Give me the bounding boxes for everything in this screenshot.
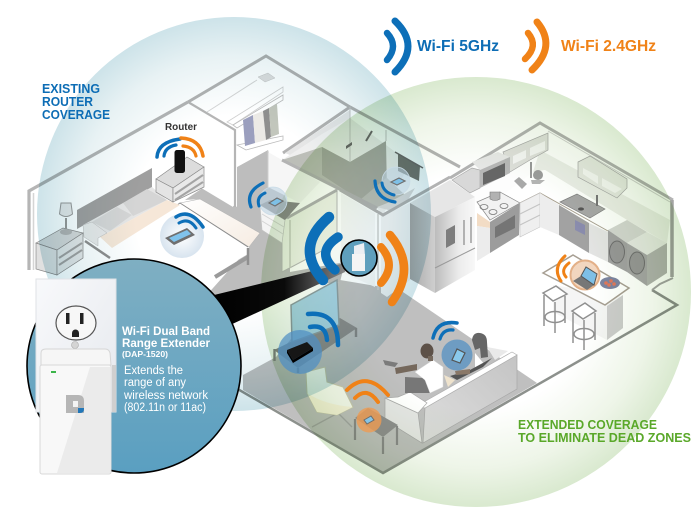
callout text: Wi-Fi Dual Band bbox=[122, 326, 210, 338]
washer and dryer bbox=[608, 220, 647, 243]
callout text: (802.11n or 11ac) bbox=[124, 402, 206, 414]
central walls bbox=[282, 177, 450, 297]
green coverage circle bbox=[261, 77, 691, 507]
counter top bbox=[503, 170, 627, 230]
night table bbox=[36, 228, 83, 250]
callout text: (DAP-1520) bbox=[122, 350, 168, 359]
sofa bbox=[385, 347, 517, 443]
grey living room floor bbox=[243, 280, 537, 472]
device bubble: laptop on sofa bbox=[433, 323, 472, 370]
callout text bbox=[122, 326, 211, 414]
kitchen bbox=[410, 123, 673, 293]
router with wifi arcs bbox=[157, 138, 203, 173]
label: existing router coverage: ROUTER bbox=[42, 94, 94, 109]
device bubble: bathroom phone bbox=[375, 167, 410, 202]
kitchen and bedroom white floor bbox=[28, 150, 677, 473]
bathroom bbox=[282, 107, 460, 215]
closet bbox=[188, 56, 350, 207]
lamp bbox=[60, 203, 72, 216]
legend: wifi 2.4GHz: Wi-Fi 2.4GHz bbox=[561, 38, 656, 55]
device bubble: set-top box bbox=[278, 314, 338, 374]
label: existing router coverage: EXISTING bbox=[42, 81, 100, 96]
callout beam bbox=[210, 263, 345, 332]
label: extended coverage: EXTENDED COVERAGE bbox=[518, 417, 657, 432]
TV bbox=[274, 280, 357, 373]
large callout circle bbox=[27, 259, 241, 474]
headboard bbox=[77, 168, 152, 229]
callout text: wireless network bbox=[123, 390, 208, 402]
fridge bbox=[410, 180, 475, 217]
callout text: range of any bbox=[124, 377, 186, 389]
legend: wifi 2.4GHz bbox=[525, 22, 656, 70]
sofa inner arm bbox=[487, 347, 508, 360]
device bubble: hallway phone bbox=[250, 183, 287, 215]
lower cabinets bbox=[477, 213, 490, 228]
device bubble: island laptop bbox=[557, 256, 600, 290]
legend: wifi 5GHz bbox=[387, 21, 499, 72]
hallway wall bbox=[268, 152, 320, 203]
large wifi arcs: 2.4GHz bbox=[381, 235, 404, 302]
toaster and mixer bbox=[514, 177, 527, 189]
bedroom back wall bbox=[30, 102, 235, 270]
side table bbox=[355, 408, 398, 454]
bar stools bbox=[543, 286, 596, 350]
label: extended coverage: TO ELIMINATE DEAD ZONES bbox=[518, 430, 691, 445]
house floor plan bbox=[28, 56, 677, 473]
label: existing router coverage: COVERAGE bbox=[42, 107, 110, 122]
sink bbox=[560, 194, 605, 218]
outer floor edge bbox=[210, 290, 677, 473]
upper cabinets bbox=[503, 133, 548, 172]
device bubble: bedroom tablet bbox=[160, 214, 204, 258]
dresser near hallway bbox=[260, 205, 285, 243]
blue coverage circle bbox=[37, 17, 431, 411]
bedroom furniture bbox=[36, 157, 300, 300]
rug bbox=[180, 199, 260, 247]
callout text: Range Extender bbox=[122, 338, 211, 350]
device bubble: tablet on side table bbox=[347, 381, 388, 432]
woman on sofa bbox=[450, 333, 492, 380]
microwave bbox=[472, 152, 510, 170]
island bbox=[543, 255, 629, 340]
extender device bbox=[40, 349, 111, 474]
towel rack bbox=[398, 154, 420, 181]
legend: wifi 5GHz: Wi-Fi 5GHz bbox=[417, 38, 499, 55]
kitchen wall lower band bbox=[533, 150, 670, 243]
man on sofa bbox=[383, 344, 455, 393]
wall plate and outlet bbox=[36, 279, 116, 412]
bedroom partition wall bbox=[188, 102, 233, 207]
bedroom and hallway floor bbox=[185, 150, 345, 297]
callout text: Extends the bbox=[124, 365, 183, 377]
router dresser bbox=[156, 157, 204, 188]
bed bbox=[112, 203, 248, 300]
router label: Router bbox=[165, 122, 197, 133]
small callout circle with extender bbox=[341, 240, 377, 276]
large wifi arcs: 5GHz bbox=[310, 217, 338, 280]
stove bbox=[477, 192, 520, 220]
armchair bbox=[306, 367, 353, 427]
